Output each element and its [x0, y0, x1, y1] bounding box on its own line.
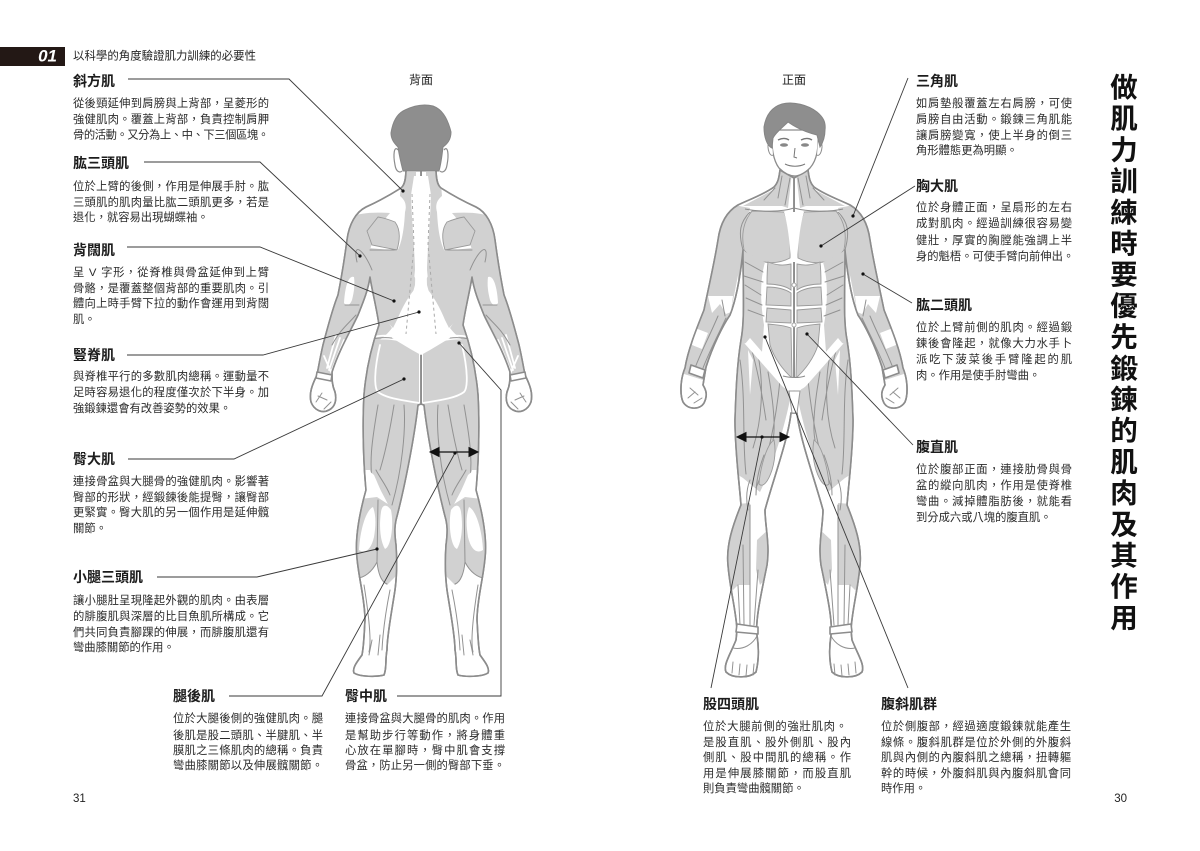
text: obliques: 位於側腹部，經過適度鍛鍊就能產生	[881, 719, 1071, 733]
text: hamstrings: 後肌是股二頭肌、半腱肌、半	[173, 728, 323, 742]
text: gluteus medius	[345, 688, 505, 772]
text: deltoid: 肩膀自由活動。鍛鍊三角肌能	[916, 112, 1072, 126]
text: obliques: 線條。腹斜肌群是位於外側的外腹斜	[881, 735, 1071, 749]
text: gluteus maximus: 臀大肌	[73, 451, 115, 467]
text: gluteus medius: 骨盆，防止另一側的臀部下垂。	[345, 758, 505, 772]
text: quadriceps: 則負責彎曲髖關節。	[703, 781, 805, 795]
text: rectus abdominis: 彎曲。減掉體脂肪後，就能看	[916, 494, 1072, 508]
text: pectoralis: 胸大肌	[916, 178, 958, 194]
text: triceps surae: 彎曲膝關節的作用。	[73, 640, 175, 654]
text: rectus abdominis	[916, 439, 1072, 524]
text: biceps: 派吃下菠菜後手臂隆起的肌	[916, 352, 1072, 366]
front view figure	[678, 73, 910, 677]
text: hamstrings: 彎曲膝關節以及伸展髖關節。	[173, 758, 323, 772]
text: latissimus dorsi: 骨骼，是覆蓋整個背部的重要肌肉。引	[73, 281, 269, 295]
text: trapezius: 斜方肌	[73, 73, 115, 89]
text: triceps surae: 們共同負責腳踝的伸展，而腓腹肌還有	[73, 625, 269, 639]
text: triceps: 三頭肌的肌肉量比肱二頭肌更多，若是	[73, 195, 269, 209]
figure label: back: 背面	[409, 73, 433, 87]
text: hamstrings: 膜肌之三條肌肉的總稱。負責	[173, 743, 323, 757]
text: deltoid: 如肩墊般覆蓋左右肩膀，可使	[916, 96, 1072, 110]
text: biceps: 鍊後會隆起，就像大力水手卜	[916, 336, 1072, 350]
text: rectus abdominis: 盆的縱向肌肉，作用是使脊椎	[916, 478, 1072, 492]
text: obliques: 肌與內側的內腹斜肌之總稱，扭轉軀	[881, 750, 1071, 764]
text: gluteus maximus: 更緊實。臀大肌的另一個作用是延伸髖	[73, 505, 269, 519]
text: rectus abdominis: 到分成六或八塊的腹直肌。	[916, 510, 1052, 524]
text: triceps: 位於上臂的後側，作用是伸展手肘。肱	[73, 179, 269, 193]
text: gluteus medius: 是幫助步行等動作，將身體重	[345, 728, 505, 742]
text: quadriceps	[703, 696, 851, 795]
text: erector spinae	[73, 347, 269, 415]
text: pectoralis	[916, 178, 1074, 263]
text: biceps	[916, 297, 1073, 382]
leader lines	[127, 78, 915, 696]
text: latissimus dorsi: 肌。	[73, 313, 96, 326]
text: obliques: 幹的時候，外腹斜肌與內腹斜肌會同	[881, 766, 1071, 780]
text: hamstrings	[173, 688, 323, 772]
text: quadriceps: 是股直肌、股外側肌、股內	[703, 735, 851, 749]
text: obliques	[881, 696, 1071, 795]
text: trapezius: 從後頸延伸到肩膀與上背部，呈菱形的	[73, 96, 269, 110]
text: quadriceps: 用是伸展膝關節，而股直肌	[703, 766, 851, 780]
vertical title: 做肌力訓練時要優先鍛鍊的肌肉及其作用	[1110, 72, 1138, 633]
figure label: front: 正面	[782, 73, 806, 87]
text: deltoid	[916, 73, 1072, 157]
text: erector spinae: 強鍛鍊還會有改善姿勢的效果。	[73, 401, 231, 415]
text: erector spinae: 豎脊肌	[73, 347, 115, 363]
text: obliques: 時作用。	[881, 782, 926, 795]
chapter number tab: 01	[38, 46, 57, 66]
text: triceps surae: 讓小腿肚呈現隆起外觀的肌肉。由表層	[73, 593, 269, 607]
text: quadriceps: 側肌、股中間肌的總稱。作	[703, 750, 851, 764]
spine highlight	[392, 176, 450, 355]
text: biceps: 肉。作用是使手肘彎曲。	[916, 368, 1040, 382]
text: hamstrings: 位於大腿後側的強健肌肉。腿	[173, 711, 323, 725]
text: hamstrings: 腿後肌	[173, 688, 215, 704]
text: deltoid: 讓肩膀變寬，使上半身的倒三	[916, 128, 1072, 142]
chapter number tab	[0, 46, 65, 66]
text: gluteus maximus: 臀部的形狀，經鍛鍊後能提臀，讓臀部	[73, 490, 269, 504]
text: quadriceps: 股四頭肌	[703, 696, 759, 712]
text: latissimus dorsi: 呈 V 字形，從脊椎與骨盆延伸到上臂	[73, 265, 269, 279]
text: triceps surae: 小腿三頭肌	[73, 569, 143, 585]
text: latissimus dorsi: 體向上時手臂下拉的動作會運用到背闊	[73, 296, 269, 310]
page number 31: 31	[73, 793, 86, 805]
briefs	[745, 338, 843, 390]
text: pectoralis: 成對肌肉。經過訓練很容易變	[916, 216, 1072, 230]
text: triceps	[73, 155, 269, 224]
text: obliques: 腹斜肌群	[881, 696, 937, 712]
text: quadriceps: 位於大腿前側的強壯肌肉。	[703, 719, 847, 733]
text: gluteus medius: 臀中肌	[345, 688, 387, 704]
hair back	[391, 105, 451, 171]
chapter subtitle: 以科學的角度驗證肌力訓練的必要性	[73, 48, 256, 62]
text: pectoralis: 健壯，厚實的胸膛能強調上半	[916, 233, 1072, 247]
face	[772, 130, 818, 176]
text: triceps: 退化，就容易出現蝴蝶袖。	[73, 210, 209, 224]
text: gluteus maximus: 連接骨盆與大腿骨的強健肌肉。影響著	[73, 474, 269, 488]
text: gluteus medius: 心放在單腳時，臀中肌會支撐	[345, 743, 505, 757]
text: erector spinae: 與脊椎平行的多數肌肉總稱。運動量不	[73, 369, 269, 383]
text: gluteus maximus	[73, 451, 269, 535]
text: gluteus maximus: 關節。	[73, 521, 107, 535]
text: erector spinae: 足時容易退化的程度僅次於下半身。加	[73, 385, 269, 399]
back view figure	[297, 73, 545, 676]
text: deltoid: 三角肌	[916, 73, 958, 89]
page number 30: 30	[1114, 793, 1127, 805]
text: trapezius: 強健肌肉。覆蓋上背部，負責控制肩胛	[73, 112, 269, 126]
hair front	[764, 103, 825, 148]
text: latissimus dorsi: 背闊肌	[73, 242, 115, 258]
text: trapezius: 骨的活動。又分為上、中、下三個區塊。	[73, 128, 269, 142]
text: triceps surae: 的腓腹肌與深層的比目魚肌所構成。它	[73, 609, 269, 623]
text: deltoid: 角形體態更為明顯。	[916, 143, 1018, 157]
text: pectoralis: 身的魁梧。可使手臂向前伸出。	[916, 249, 1074, 263]
text: triceps: 肱三頭肌	[73, 155, 129, 171]
text: biceps: 位於上臂前側的肌肉。經過鍛	[916, 320, 1073, 334]
text: rectus abdominis: 腹直肌	[916, 439, 958, 455]
arrow: front thigh width	[737, 432, 789, 442]
text: trapezius	[73, 73, 269, 142]
text: biceps: 肱二頭肌	[916, 297, 972, 313]
arrow: back thigh width	[430, 448, 478, 456]
text: triceps surae	[73, 569, 269, 654]
text: pectoralis: 位於身體正面，呈扇形的左右	[916, 200, 1072, 214]
text: latissimus dorsi	[73, 242, 269, 326]
text: gluteus medius: 連接骨盆與大腿骨的肌肉。作用	[345, 711, 505, 725]
text: rectus abdominis: 位於腹部正面，連接肋骨與骨	[916, 462, 1072, 476]
